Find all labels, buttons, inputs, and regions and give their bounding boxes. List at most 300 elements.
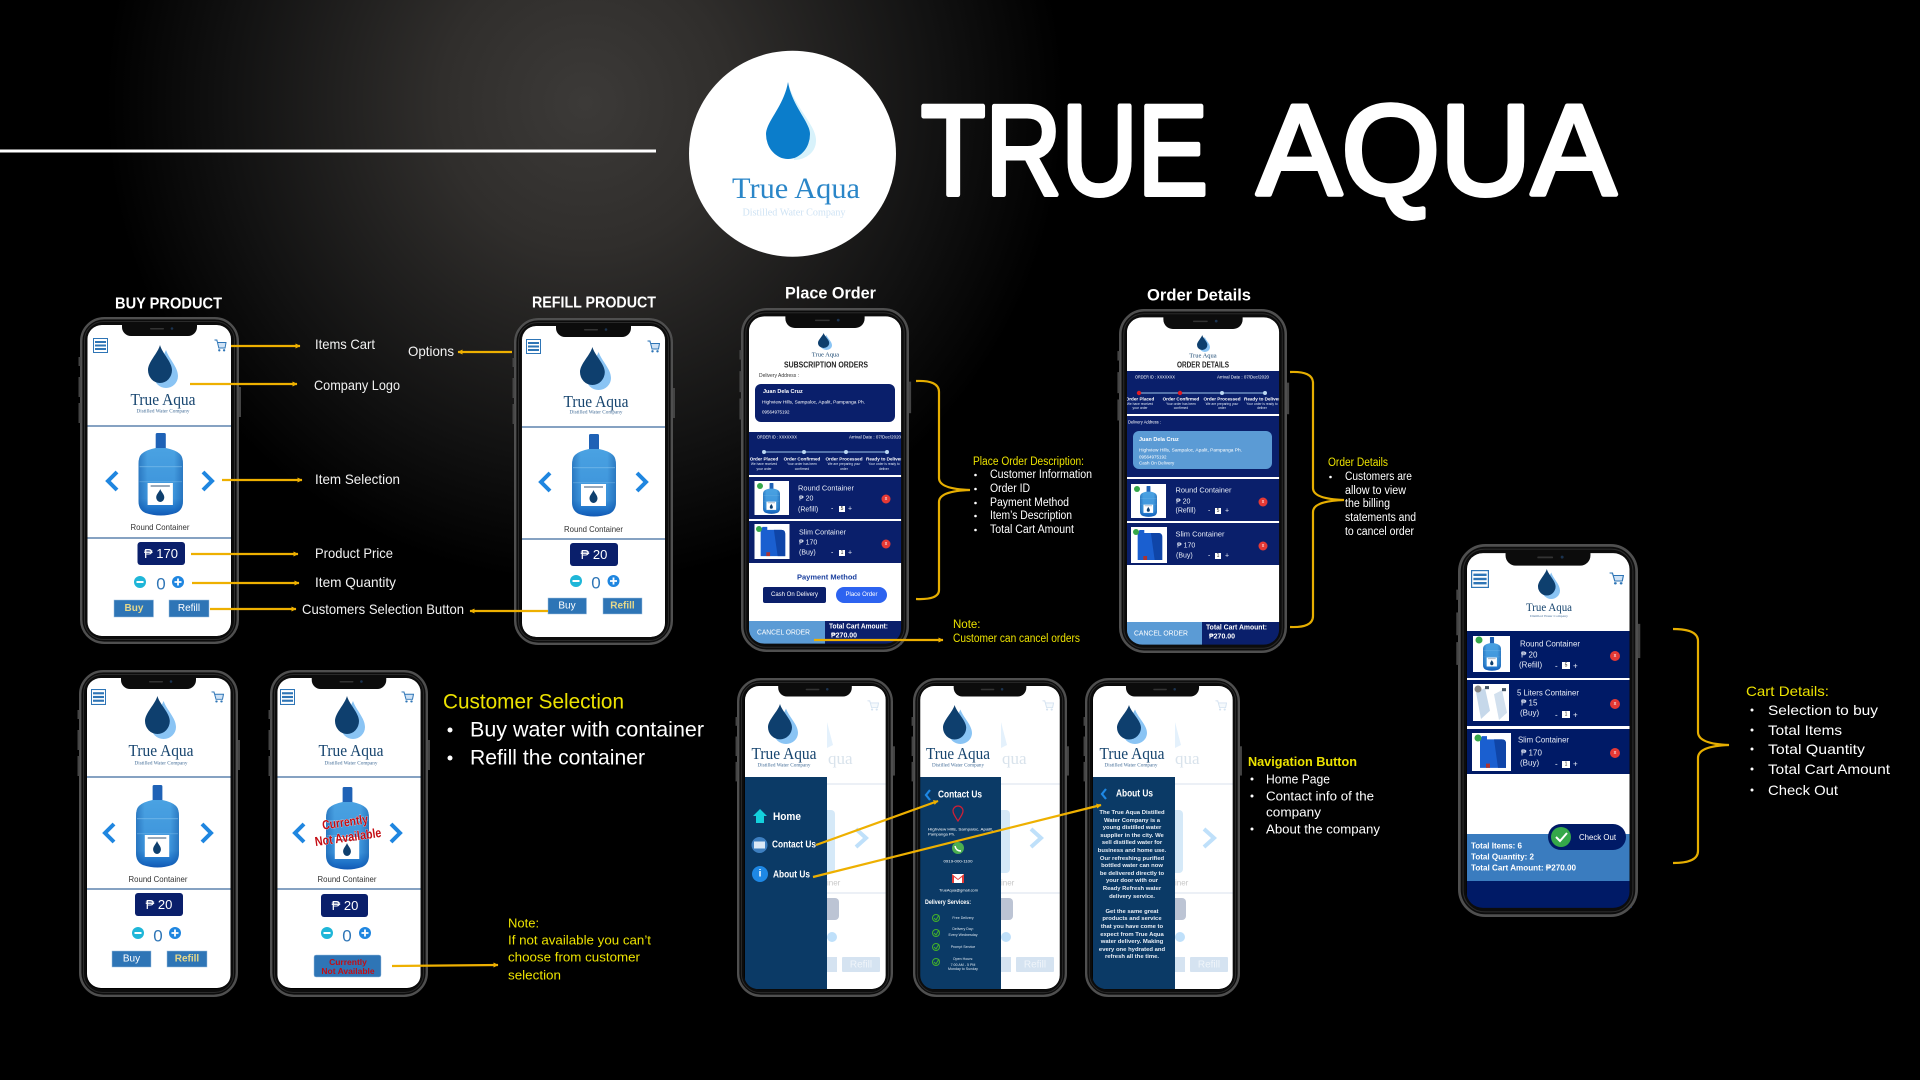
footer bar: ₱270.00 (1209, 634, 1235, 640)
order tracker: ORDER ID : XXXXXXX (757, 434, 797, 440)
note: not available: Note: (508, 916, 539, 930)
order tracker: Order Placed (750, 456, 778, 462)
order item: slim container: 1 (1217, 553, 1220, 559)
contact panel: Highview Hills, Sampaloc, Apalit, (928, 826, 993, 832)
about panel: sell distilled water for (1102, 840, 1163, 846)
side menu: Contact Us (772, 840, 816, 850)
item selection (105, 785, 211, 884)
cart item: round container: (Refill) (1519, 660, 1542, 670)
cart totals: Total Quantity: 2 (1471, 852, 1535, 862)
order item: slim container: x (885, 541, 888, 547)
header (1177, 335, 1230, 370)
order item: round container: x (1262, 499, 1265, 505)
faded home screen: Refill (1198, 960, 1220, 970)
phone: refill product (512, 318, 675, 645)
order tracker: Ready to Deliver (866, 456, 902, 462)
delivery address: Delivery Address : (1128, 420, 1161, 426)
note: not available: selection (508, 968, 561, 982)
callout: options: Options (408, 343, 454, 359)
about panel: young distilled water (1103, 825, 1162, 831)
customer selection buttons (548, 598, 642, 614)
phone: navigation menu (736, 678, 895, 997)
order tracker: Order Confirmed (1163, 396, 1200, 402)
company logo (926, 705, 990, 768)
text: customer selection: Customer Selection (443, 690, 624, 714)
order tracker: order (1218, 406, 1227, 410)
order item: slim container: Slim Container (799, 530, 847, 536)
text: order details: allow to view (1345, 485, 1407, 497)
contact panel (920, 777, 1001, 989)
cart item: slim container: Slim Container (1518, 736, 1569, 744)
about panel: be delivered directly to (1100, 871, 1164, 877)
company logo (128, 696, 194, 766)
order item: slim container: ₱ 170 (1177, 542, 1195, 550)
delivery address: 09564975192 (1139, 454, 1167, 460)
faded home screen (1168, 701, 1233, 972)
company logo: True Aqua (926, 744, 990, 763)
not available stamp: Not Available (314, 825, 382, 849)
contact panel: Delivery Day: (952, 927, 974, 931)
company logo: True Aqua (564, 392, 629, 411)
order tracker: Ready to Deliver (1244, 396, 1280, 402)
callout: customers selection button: Customers Selection Button (302, 601, 464, 617)
cart item: 5 liters container: ₱ 15 (1521, 698, 1538, 708)
order tracker: Your order is ready to (868, 462, 900, 466)
header (759, 333, 869, 379)
about panel: products and service (1102, 916, 1162, 922)
phone: contact us (912, 678, 1069, 997)
phone: cart (1456, 544, 1640, 917)
cart totals: Total Items: 6 (1471, 842, 1523, 850)
text: navigation button: Home Page (1266, 772, 1330, 786)
item quantity (321, 926, 371, 946)
about panel: business and home use. (1098, 848, 1167, 854)
footer bar: CANCEL ORDER (757, 628, 811, 636)
logo circle (689, 51, 896, 257)
contact panel: Contact Us (938, 790, 982, 800)
company logo: True Aqua (1526, 600, 1573, 614)
payment method: Cash On Delivery (771, 592, 818, 598)
cart item: 5 liters container (1467, 680, 1632, 726)
product price (321, 894, 368, 917)
callout: item quantity: Item Quantity (315, 574, 396, 590)
order item: slim container: + (848, 550, 852, 556)
company logo (130, 345, 196, 414)
company logo: Distilled Water Company (324, 762, 378, 766)
customer selection buttons: Buy (123, 954, 140, 964)
product price: ₱ 170 (144, 546, 178, 561)
order item: round container: (Refill) (1176, 508, 1196, 514)
phone: place order (739, 308, 911, 652)
header: True Aqua (1189, 352, 1217, 360)
order item: round container: (Refill) (798, 506, 818, 514)
order item: round container (1127, 479, 1280, 521)
about panel: supplier in the city. We (1100, 833, 1165, 839)
order tracker: Arrival Date : 07/Dec/2020 (1217, 374, 1269, 380)
customer card: Highview Hills, Sampaloc, Apalit, Pampanga Ph. (762, 400, 865, 404)
order tracker: Your order has been (1166, 402, 1196, 406)
order item: slim container: (Buy) (799, 550, 816, 556)
text: cart details: Check Out (1768, 782, 1838, 798)
heading: order details: Order Details (1147, 286, 1251, 304)
order item: slim container: Slim Container (1176, 532, 1225, 538)
unavailable button (314, 955, 381, 977)
order tracker (749, 432, 902, 475)
customer card: 09564975192 (762, 410, 790, 414)
payment method: Payment Method (797, 572, 857, 582)
text: place order description: Total Cart Amount (990, 524, 1075, 536)
heading: place order: Place Order (785, 284, 876, 302)
text: cart details: Selection to buy (1768, 702, 1878, 718)
cart totals (1467, 834, 1632, 908)
customer selection buttons: Buy (558, 600, 576, 612)
text: cart details: Cart Details: (1746, 683, 1829, 699)
text: navigation button: company (1266, 804, 1322, 820)
customer card (755, 384, 895, 422)
header: Delivery Address : (759, 373, 799, 379)
order item: slim container: - (1208, 552, 1211, 560)
footer bar (749, 621, 902, 645)
footer bar (1127, 622, 1280, 646)
cart item: round container: x (1614, 653, 1617, 659)
order item: slim container (1127, 523, 1280, 565)
order item: round container: Round Container (1176, 488, 1232, 494)
faded home screen: qua (1002, 749, 1027, 768)
order tracker: your order (1132, 406, 1148, 410)
cart item: 5 liters container: x (1614, 701, 1617, 707)
note: not available: choose from customer (508, 950, 641, 964)
order item: round container: ₱ 20 (799, 496, 814, 502)
faded home screen: Refill (1024, 960, 1046, 970)
text: place order description: Place Order Description: (973, 456, 1084, 468)
order item: round container: - (831, 506, 834, 512)
text: order details: statements and (1345, 512, 1416, 524)
item quantity: 0 (153, 926, 163, 946)
contact panel: Delivery Services: (925, 900, 971, 906)
product price (138, 542, 185, 565)
order item: slim container: + (1225, 552, 1229, 560)
arrow: about us (813, 805, 1101, 877)
about panel: About Us (1116, 788, 1153, 800)
customer selection buttons: Refill (610, 600, 635, 612)
company logo: True Aqua (318, 741, 384, 760)
order item: round container: x (885, 496, 888, 502)
faded home screen: iner (1175, 878, 1189, 888)
payment method (763, 572, 887, 603)
footer bar: Total Cart Amount: (829, 624, 888, 630)
text: order details: to cancel order (1345, 526, 1414, 538)
bracket: cart (1673, 629, 1729, 863)
order tracker: confirmed (795, 467, 809, 471)
heading: buy product: BUY PRODUCT (115, 296, 222, 312)
order item: slim container: x (1262, 543, 1265, 549)
order item: round container: + (1225, 508, 1229, 514)
text: navigation button: Navigation Button (1248, 755, 1357, 769)
company logo: True Aqua (128, 741, 194, 760)
bracket: place order (916, 381, 970, 599)
company logo: Distilled Water Company (932, 764, 985, 768)
text: customer selection: Refill the container (470, 746, 645, 770)
bracket: order details (1290, 372, 1344, 627)
order tracker: We are preparing your (828, 462, 861, 466)
cart item: slim container: - (1555, 760, 1558, 768)
cart item: slim container: (Buy) (1520, 758, 1539, 768)
faded home screen: qua (1175, 749, 1200, 768)
cart item: 5 liters container: 1 (1565, 712, 1568, 718)
text: order details (1328, 457, 1416, 538)
order tracker: Your order has been (787, 462, 817, 466)
cart item: round container: Round Container (1520, 640, 1580, 648)
order tracker: deliver (1257, 406, 1268, 410)
faded home screen: qua (828, 749, 853, 768)
order tracker: Order Confirmed (784, 456, 821, 462)
text: customer selection (443, 690, 704, 770)
order item: slim container: - (831, 550, 834, 556)
cart item: round container: 5 (1565, 662, 1568, 668)
text: navigation button: About the company (1266, 822, 1380, 836)
contact panel: TrueAqua@gmail.com (939, 888, 979, 892)
item quantity (134, 574, 184, 594)
heading: refill product: REFILL PRODUCT (532, 294, 656, 312)
footer bar: ₱270.00 (831, 632, 857, 640)
order item: round container: 5 (841, 506, 844, 512)
item quantity: 0 (156, 574, 166, 594)
cart totals: Total Cart Amount: ₱270.00 (1471, 864, 1577, 872)
text: order details: the billing (1345, 498, 1390, 510)
order item: round container: Round Container (798, 486, 855, 492)
note: not available (392, 916, 651, 982)
cart item: round container (1467, 631, 1632, 678)
about panel: delivery service. (1109, 894, 1155, 900)
order item: slim container (749, 521, 902, 563)
footer bar: CANCEL ORDER (1134, 628, 1189, 638)
text: place order description: Order ID (990, 483, 1030, 495)
delivery address: Juan Dela Cruz (1139, 437, 1179, 443)
company logo: Distilled Water Company (1104, 764, 1158, 768)
title: TRUE (921, 80, 1208, 222)
customer selection buttons: Refill (175, 954, 199, 964)
note: cancel orders: Note: (953, 619, 980, 631)
item quantity: 0 (591, 574, 601, 592)
logo circle: Distilled Water Company (742, 208, 846, 218)
text: order details: Order Details (1328, 457, 1388, 469)
payment method: Place Order (845, 592, 878, 598)
contact panel: Monday to Sunday (948, 967, 978, 971)
item quantity (132, 926, 181, 946)
contact panel: Prompt Service (951, 945, 975, 949)
product price: ₱ 20 (581, 547, 607, 562)
text: cart details: Total Quantity (1768, 741, 1865, 757)
cart item: 5 liters container: (Buy) (1520, 708, 1539, 718)
check out button (1548, 824, 1626, 850)
check out button: Check Out (1579, 832, 1617, 842)
cart item: slim container: 1 (1565, 762, 1568, 768)
text: cart details: Total Cart Amount (1768, 761, 1890, 777)
company logo: Distilled Water Company (136, 410, 190, 414)
company logo (1100, 705, 1165, 768)
about panel: Water Company is a (1104, 818, 1161, 824)
product price: ₱ 20 (332, 898, 358, 913)
footer bar: Total Cart Amount: (1206, 624, 1267, 632)
order item: round container (749, 477, 902, 519)
cart item: slim container: ₱ 170 (1521, 748, 1542, 758)
company logo (564, 347, 629, 416)
text: place order description (973, 456, 1092, 536)
about panel: bottled water can now (1101, 863, 1163, 869)
order tracker (1126, 371, 1280, 414)
order tracker: Order Processed (825, 456, 863, 462)
contact panel: 7:00 AM - 5 PM (951, 963, 975, 967)
item selection (108, 433, 212, 532)
order tracker: We are preparing your (1206, 402, 1239, 406)
product price (135, 893, 183, 916)
about panel: The True Aqua Distilled (1099, 810, 1165, 816)
item selection: Round Container (318, 874, 377, 884)
contact panel: Pampanga Ph. (928, 832, 955, 836)
logo circle: True Aqua (732, 172, 860, 205)
order tracker: deliver (879, 467, 890, 471)
faded home screen: Refill (850, 960, 872, 970)
delivery address (1127, 416, 1280, 477)
item selection (541, 434, 646, 534)
company logo: Distilled Water Company (1530, 614, 1568, 618)
phone: currently not available (269, 670, 430, 997)
title (921, 80, 1617, 222)
company logo: True Aqua (130, 390, 196, 409)
contact panel: Every Wednesday (948, 933, 978, 937)
company logo: Distilled Water Company (134, 762, 188, 766)
company logo: Distilled Water Company (758, 764, 811, 768)
text: navigation button: Contact info of the (1266, 788, 1374, 804)
not available stamp (314, 811, 382, 849)
company logo: True Aqua (752, 744, 817, 763)
callout: options (408, 343, 512, 359)
company logo (318, 696, 384, 766)
text: navigation button (1248, 755, 1380, 836)
side menu: Home (773, 811, 801, 823)
order item: slim container: (Buy) (1176, 552, 1193, 560)
order item: round container: ₱ 20 (1176, 498, 1191, 506)
company logo: Distilled Water Company (570, 410, 623, 416)
customer card: Juan Dela Cruz (763, 389, 803, 395)
cart item: 5 liters container: + (1573, 710, 1578, 720)
header rule (0, 150, 656, 152)
order tracker: Order Processed (1203, 396, 1241, 402)
faded home screen (820, 701, 886, 972)
about panel: that you have come to (1101, 924, 1163, 930)
item quantity (570, 574, 620, 592)
order item: round container: - (1208, 508, 1211, 514)
product price: ₱ 20 (146, 897, 172, 912)
cart item: slim container (1467, 729, 1632, 774)
callout: items cart: Items Cart (315, 336, 375, 352)
cart item: 5 liters container: - (1555, 710, 1558, 720)
cart item: slim container: + (1573, 760, 1578, 768)
order item: round container: 5 (1217, 508, 1220, 514)
order tracker: order (840, 467, 849, 471)
text: place order description: Payment Method (990, 497, 1069, 509)
order tracker: Order Placed (1126, 396, 1154, 402)
order item: round container: + (848, 506, 852, 512)
cart item: round container: + (1573, 662, 1578, 670)
contact panel: Open Hours: (953, 957, 973, 961)
header: ORDER DETAILS (1177, 360, 1230, 370)
cart item: round container: - (1555, 662, 1558, 670)
order tracker: Your order is ready to (1246, 402, 1278, 406)
phone: order details (1117, 309, 1289, 653)
faded home screen: iner (827, 878, 841, 888)
about panel: your door with our (1106, 878, 1159, 884)
about panel: water delivery. Making (1100, 939, 1164, 945)
phone: buy product (78, 317, 241, 644)
cart item: slim container: x (1614, 750, 1617, 756)
product price (570, 543, 618, 566)
about panel: Our refreshing purified (1100, 856, 1164, 862)
unavailable button: Not Available (321, 966, 375, 976)
header: SUBSCRIPTION ORDERS (784, 360, 869, 370)
order tracker: confirmed (1174, 406, 1188, 410)
about panel: expect from True Aqua (1100, 932, 1165, 938)
callout: company logo: Company Logo (314, 377, 400, 393)
customer selection buttons: Buy (125, 603, 144, 614)
order tracker: ORDER ID : XXXXXXX (1135, 374, 1175, 380)
cart item: round container: ₱ 20 (1521, 650, 1538, 660)
about panel: Ready Refresh water (1103, 886, 1162, 892)
note: not available: If not available you can’t (508, 932, 651, 948)
side menu: i (759, 868, 762, 880)
text: cart details (1746, 683, 1890, 798)
order tracker: We have received (751, 462, 777, 466)
phone: about us (1084, 678, 1242, 997)
note: cancel orders: Customer can cancel orders (953, 633, 1080, 645)
arrow: contact us (816, 801, 938, 845)
title: AQUA (1257, 80, 1617, 222)
text: place order description: Customer Information (990, 469, 1092, 481)
faded home screen (995, 701, 1060, 972)
phone: refill selected (78, 670, 240, 997)
item selection: Round Container (128, 874, 188, 884)
unavailable button: Currently (329, 957, 367, 967)
about panel: refresh all the time. (1105, 954, 1159, 960)
company logo: True Aqua (1100, 744, 1165, 763)
about panel: every one hydrated and (1099, 947, 1165, 953)
about panel (1093, 777, 1175, 989)
text: cart details: Total Items (1768, 722, 1842, 738)
side menu: About Us (773, 870, 810, 880)
customer selection buttons (114, 600, 209, 617)
order item: slim container: ₱ 170 (799, 540, 817, 546)
customer selection buttons: Refill (178, 603, 200, 614)
item selection: Round Container (130, 522, 190, 532)
order tracker: your order (756, 467, 772, 471)
text: customer selection: Buy water with container (470, 718, 704, 742)
note: cancel orders (814, 619, 1080, 645)
delivery address: Cash On Delivery (1139, 460, 1175, 466)
callout: item selection: Item Selection (315, 471, 400, 487)
order tracker: Arrival Date : 07/Dec/2020 (849, 434, 901, 440)
contact panel: Free Delivery (952, 916, 974, 920)
contact panel: 0919-000-1100 (944, 858, 973, 864)
callout: product price: Product Price (315, 545, 393, 561)
header: True Aqua (812, 352, 839, 358)
order item: slim container: 1 (841, 550, 844, 556)
item selection: Round Container (564, 524, 623, 534)
company logo (1526, 569, 1573, 618)
delivery address: Highview Hills, Sampaloc, Apalit, Pampanga Ph. (1139, 448, 1242, 452)
company logo (752, 704, 817, 768)
cart item: 5 liters container: 5 Liters Container (1517, 688, 1579, 698)
side menu (745, 777, 827, 989)
